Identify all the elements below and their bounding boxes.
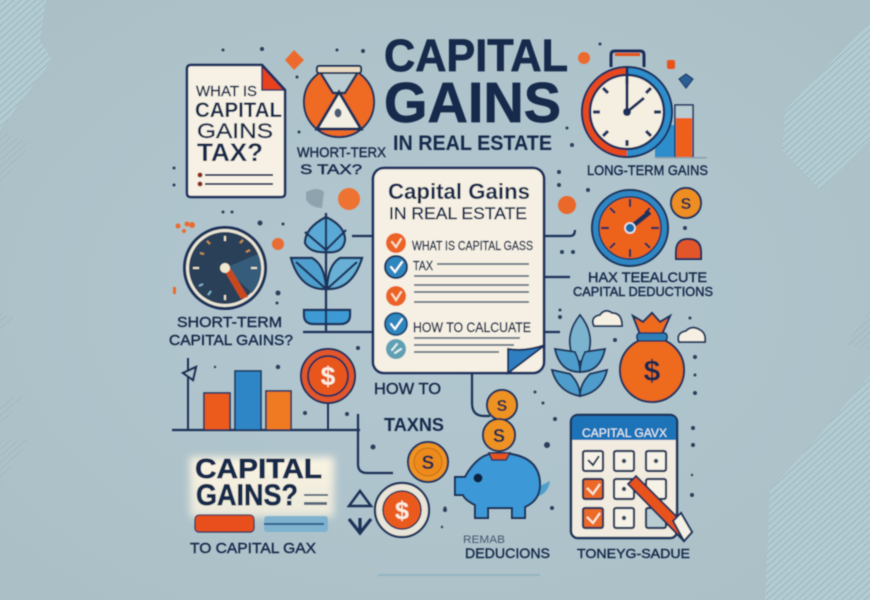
label: how to calculate capital deductions: HAX TEEALCUTE bbox=[588, 269, 707, 285]
label: how to calculate capital deductions bbox=[573, 269, 713, 299]
callout heading: CAPITAL bbox=[195, 453, 322, 484]
icon: dollar coin: $ bbox=[395, 497, 409, 525]
document corner fold bbox=[262, 66, 284, 90]
label: short-term tax bbox=[297, 144, 387, 177]
accents around gauge bbox=[173, 222, 284, 294]
title: IN REAL ESTATE bbox=[393, 132, 552, 155]
checklist text: WHAT IS CAPITAL GASS bbox=[412, 239, 533, 253]
icon: dollar badge bbox=[671, 188, 701, 218]
icon: plant bbox=[291, 213, 362, 332]
checklist text bbox=[412, 239, 533, 335]
document text: GAINS bbox=[197, 120, 273, 143]
icon: dollar badge: S bbox=[681, 196, 692, 213]
label: short-term tax: WHORT-TERX bbox=[297, 144, 387, 160]
label: short-term capital gains: CAPITAL GAINS? bbox=[169, 333, 293, 349]
title: CAPITAL bbox=[384, 30, 568, 81]
icon: dollar coin on stem bbox=[301, 349, 355, 430]
icon: stopwatch bbox=[581, 51, 707, 158]
icon: clouds bbox=[593, 311, 705, 342]
icon: coin stack bbox=[483, 390, 517, 451]
icon: money bag bbox=[620, 313, 684, 402]
label: short-term tax: S TAX? bbox=[300, 161, 362, 177]
icon: gold coin: S bbox=[422, 453, 434, 474]
label: deductions: REMAB bbox=[463, 534, 505, 546]
panel heading bbox=[388, 179, 530, 223]
document text: CAPITAL bbox=[195, 99, 282, 122]
label: long-term gains: LONG-TERM GAINS bbox=[587, 162, 708, 178]
checklist text: TAX bbox=[413, 259, 434, 273]
title bbox=[384, 30, 568, 155]
document text: WHAT IS bbox=[196, 83, 257, 100]
icon: coin stack: S bbox=[493, 426, 505, 446]
bar beside stopwatch bbox=[655, 105, 693, 158]
orange blob accent bbox=[306, 188, 360, 210]
panel heading: Capital Gains bbox=[388, 179, 530, 204]
callout blue button bbox=[264, 516, 328, 532]
icon: up and down arrows bbox=[349, 491, 371, 533]
icon: hourglass bbox=[304, 66, 374, 137]
callout small text bbox=[304, 494, 328, 505]
central document panel bbox=[373, 168, 545, 373]
checklist placeholder lines bbox=[414, 263, 529, 353]
icon: leaf sprig bbox=[552, 315, 607, 396]
document list lines bbox=[198, 172, 273, 186]
callout heading bbox=[195, 453, 322, 512]
label: how to: HOW TO bbox=[374, 381, 441, 398]
document text: TAX? bbox=[197, 139, 263, 167]
icon: gold coin bbox=[408, 442, 448, 482]
label: how to calculate capital deductions: CAPITAL DEDUCTIONS bbox=[573, 284, 713, 299]
page fold bbox=[508, 345, 545, 373]
pencil bbox=[628, 476, 692, 541]
calendar boxes bbox=[583, 451, 666, 528]
label: deductions bbox=[463, 534, 550, 561]
connector lines bbox=[172, 230, 575, 575]
label: short-term capital gains bbox=[169, 314, 293, 349]
title: GAINS bbox=[384, 71, 561, 135]
checklist text: HOW TO CALCUATE bbox=[413, 319, 531, 335]
bar chart bbox=[183, 358, 291, 430]
document text bbox=[195, 83, 282, 167]
label: to capital gax: TO CAPITAL GAX bbox=[190, 540, 316, 557]
icon: dollar coin bbox=[375, 483, 429, 537]
accent: orange dot bbox=[558, 196, 576, 214]
label: short-term capital gains: SHORT-TERM bbox=[177, 314, 282, 331]
icon: money bag: $ bbox=[644, 355, 661, 388]
icon: coin stack: S bbox=[497, 398, 508, 415]
label: toney-sadue: TONEYG-SADUE bbox=[577, 546, 690, 561]
icon: calendar checklist bbox=[571, 415, 692, 541]
icon: small dome bbox=[676, 239, 701, 259]
icon: dark gauge bbox=[183, 226, 267, 310]
calendar header text: CAPITAL GAVX bbox=[582, 426, 667, 440]
callout heading: GAINS? bbox=[196, 479, 298, 512]
calendar checks bbox=[587, 456, 600, 523]
callout orange button bbox=[195, 515, 254, 532]
icon: dollar coin on stem: $ bbox=[321, 361, 336, 391]
panel heading: IN REAL ESTATE bbox=[389, 204, 527, 223]
document: what is capital gains tax bbox=[187, 65, 285, 197]
label: taxns: TAXNS bbox=[384, 415, 444, 435]
checklist item icons bbox=[385, 233, 407, 359]
accents around stopwatch bbox=[578, 52, 693, 88]
icon: piggy bank bbox=[455, 453, 550, 518]
label: deductions: DEDUCIONS bbox=[465, 545, 550, 561]
small decorative specks bbox=[172, 42, 697, 528]
panel: capital gains callout bbox=[190, 453, 334, 532]
diamond accent bbox=[285, 50, 304, 70]
icon: orange timer dial bbox=[592, 190, 668, 266]
